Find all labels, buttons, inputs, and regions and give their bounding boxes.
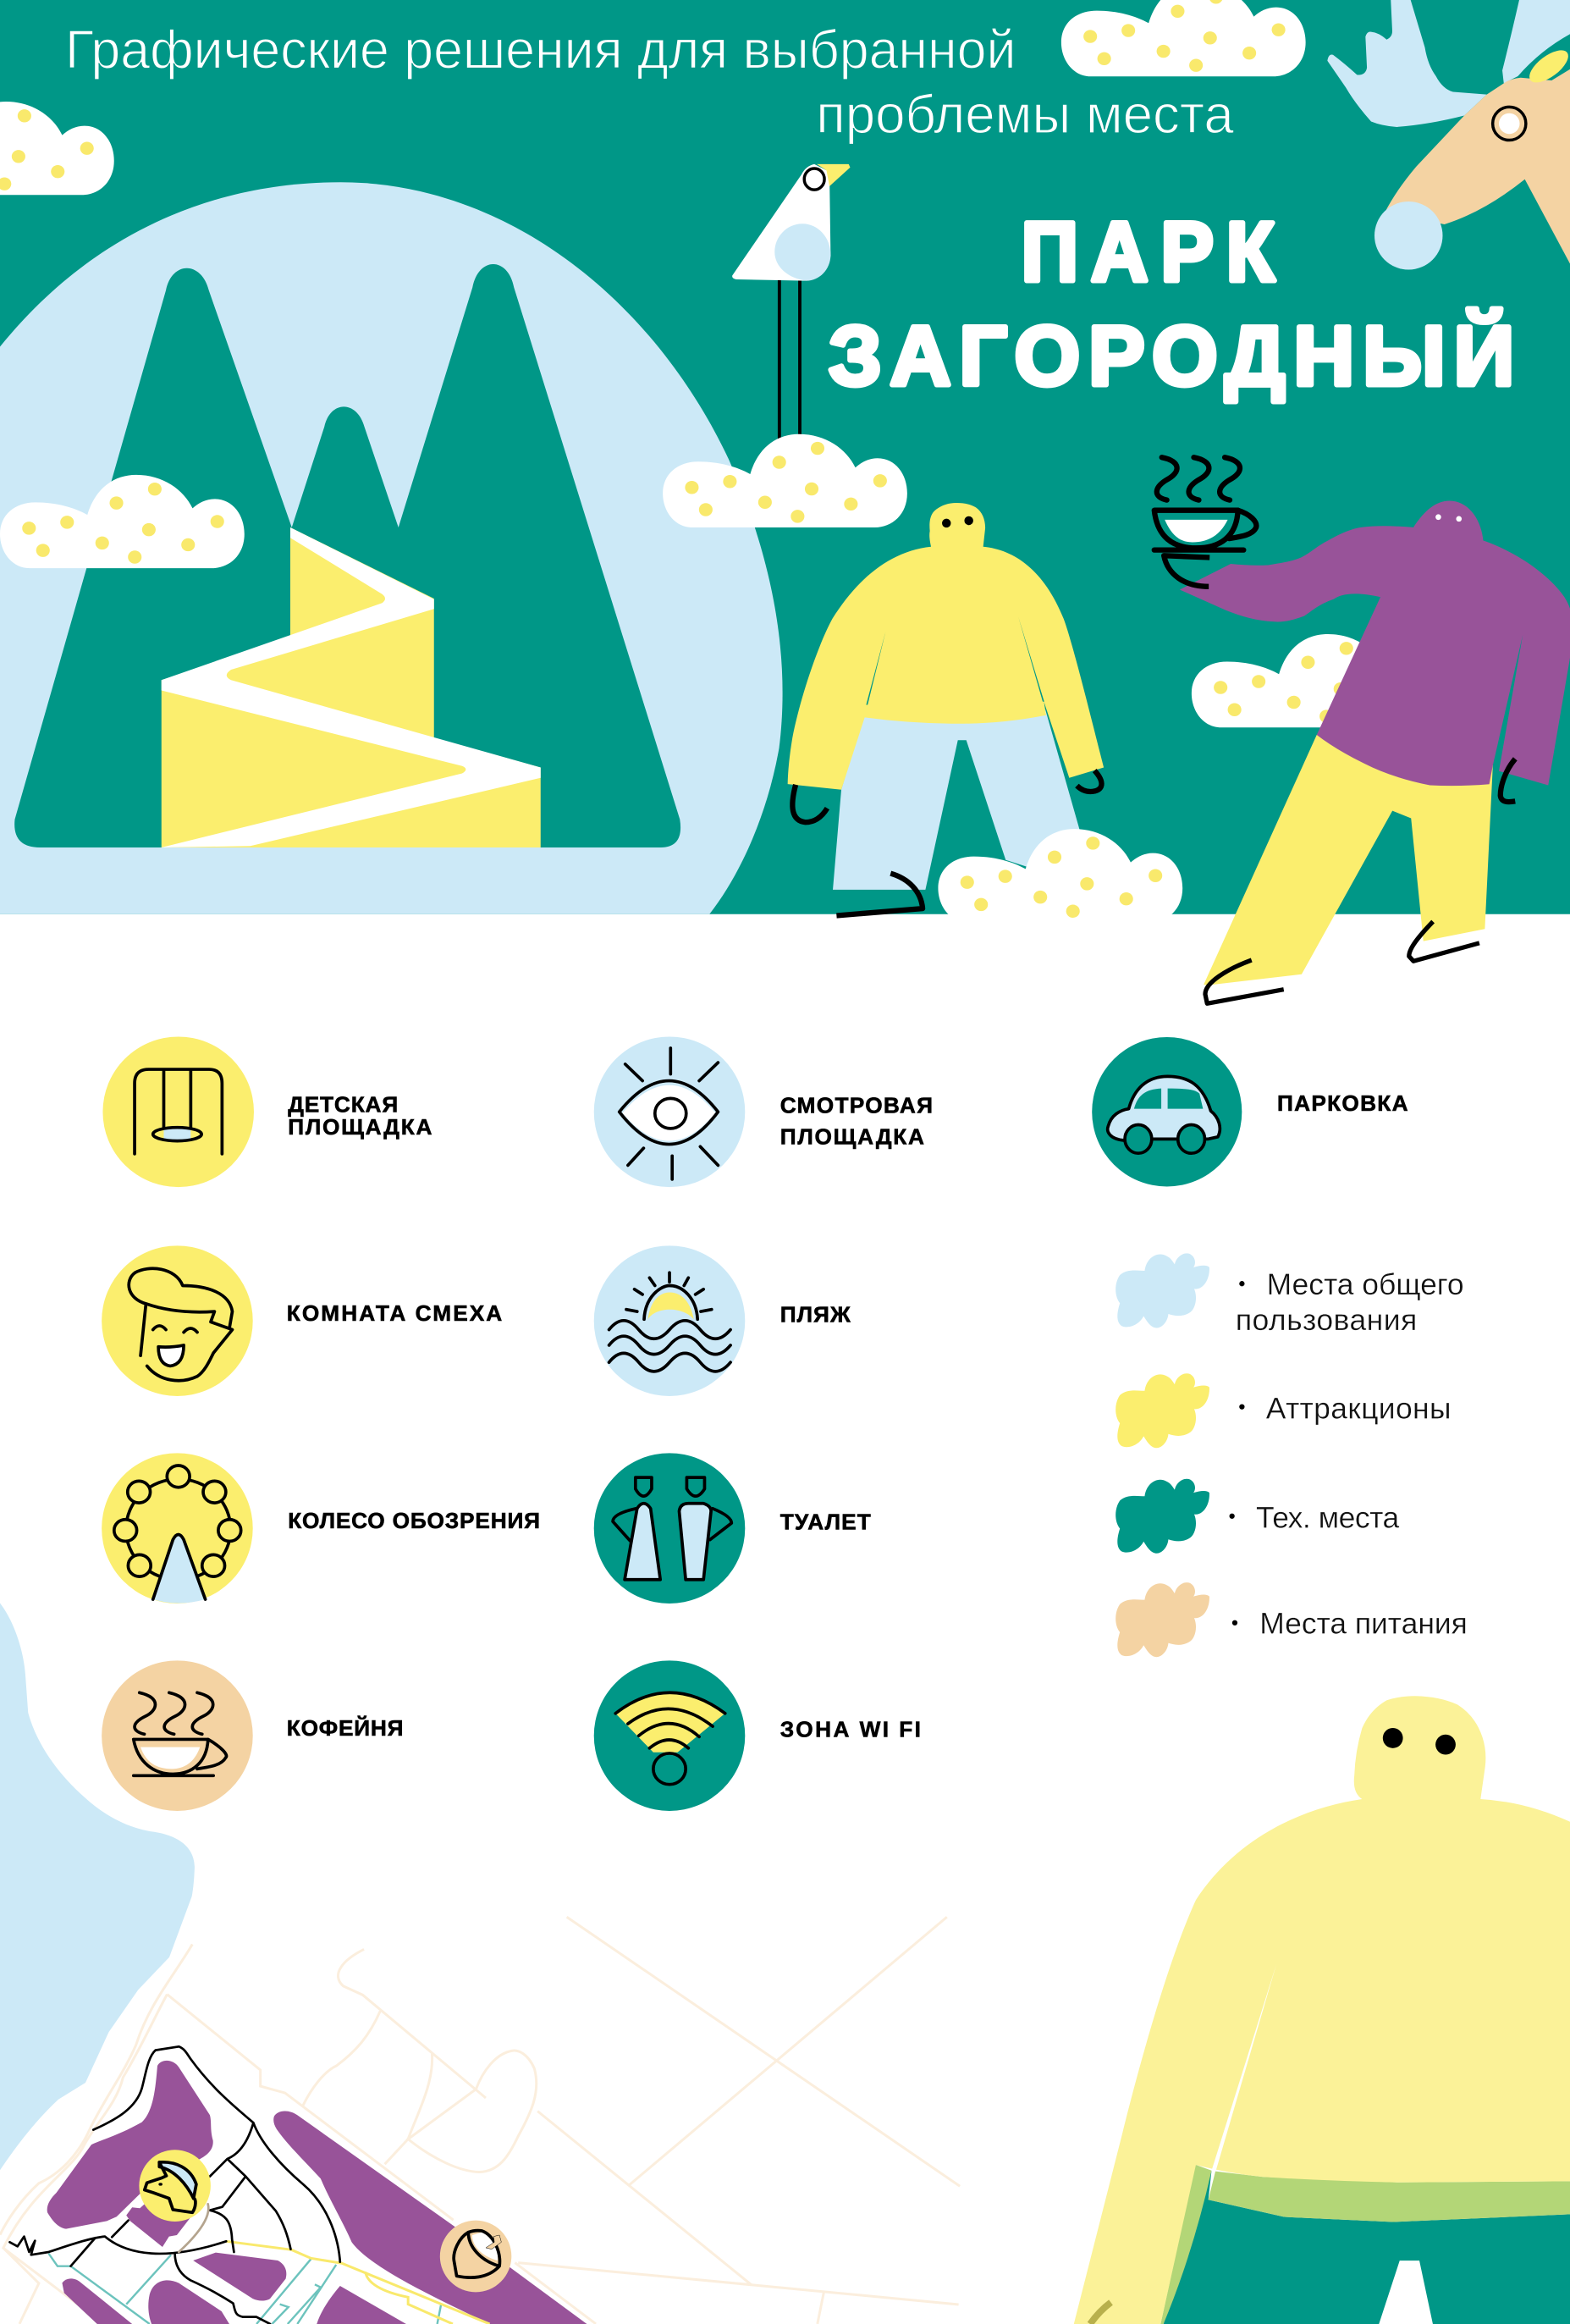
cloud: behind purple figure — [1192, 634, 1436, 727]
light blue hill — [0, 182, 783, 914]
cloud: at ground — [938, 829, 1182, 922]
park map — [9, 2046, 587, 2324]
map marker: acorn — [440, 2221, 511, 2292]
icon: swing — [102, 1036, 254, 1187]
purple figure — [1180, 501, 1570, 1003]
water: lower left — [0, 1604, 195, 2170]
icon: car — [1092, 1037, 1242, 1186]
icon labels: КОМНАТА СМЕХА — [287, 1300, 502, 1326]
icon labels: СМОТРОВАЯ — [780, 1093, 933, 1118]
yellow zigzag path — [162, 527, 541, 847]
title: ПАРК — [1022, 204, 1275, 299]
title: ЗАГОРОДНЫЙ — [829, 307, 1514, 403]
icon labels: КОЛЕСО ОБОЗРЕНИЯ — [288, 1508, 540, 1533]
legend text — [1236, 1267, 1468, 1640]
icon: eye — [594, 1036, 745, 1187]
map marker: horse — [139, 2150, 211, 2222]
yellow figure — [788, 503, 1104, 916]
map: teal paths — [48, 2254, 441, 2324]
legend swatches — [1116, 1253, 1209, 1657]
title — [829, 204, 1514, 403]
legend bullets — [1229, 1281, 1245, 1626]
icon labels: КОФЕЙНЯ — [287, 1715, 404, 1741]
legend text: Тех. места — [1256, 1500, 1399, 1534]
subtitle — [65, 19, 1234, 145]
icon: wi-fi — [594, 1660, 745, 1811]
subtitle: проблемы места — [816, 84, 1234, 145]
legend — [1116, 1253, 1468, 1657]
map: black paths — [9, 2046, 340, 2324]
cloud: top left — [0, 102, 114, 195]
map: yellow paths — [226, 2241, 490, 2324]
large pale figure — [1074, 1696, 1570, 2324]
legend text: Места питания — [1259, 1606, 1468, 1640]
icon labels: ПЛЯЖ — [780, 1301, 851, 1327]
subtitle: Графические решения для выбранной — [65, 19, 1016, 80]
icon labels: ПАРКОВКА — [1277, 1090, 1408, 1116]
icon labels: ДЕТСКАЯ — [288, 1091, 398, 1117]
legend text: пользования — [1236, 1303, 1417, 1337]
legend text: Аттракционы — [1266, 1391, 1451, 1425]
icon: laughing face — [102, 1245, 253, 1396]
faint street lines — [0, 1917, 960, 2324]
icon labels — [287, 1090, 1408, 1742]
cloud: under bird — [663, 434, 907, 527]
mountains — [14, 264, 680, 847]
cloud: over mountains — [0, 475, 245, 568]
icons grid: columns one and two — [102, 1036, 745, 1811]
map: purple zones — [47, 2061, 587, 2324]
moose — [1327, 0, 1570, 270]
coffee cup held by figure — [1154, 457, 1256, 587]
icon: coffee cup — [102, 1660, 253, 1811]
icon: ferris wheel — [102, 1453, 253, 1604]
cloud: top centre right — [1061, 0, 1306, 76]
bird — [732, 164, 850, 444]
icon labels: ПЛОЩАДКА — [288, 1114, 432, 1140]
icon labels: ПЛОЩАДКА — [780, 1123, 924, 1149]
icon labels: ЗОНА WI FI — [780, 1716, 921, 1742]
icon: toilet figures — [594, 1453, 745, 1604]
icon: beach sunrise — [594, 1245, 745, 1396]
map: brown path — [179, 2204, 208, 2252]
icon labels: ТУАЛЕТ — [780, 1509, 871, 1534]
legend text: Места общего — [1267, 1267, 1464, 1301]
panel: teal header — [0, 0, 1570, 914]
